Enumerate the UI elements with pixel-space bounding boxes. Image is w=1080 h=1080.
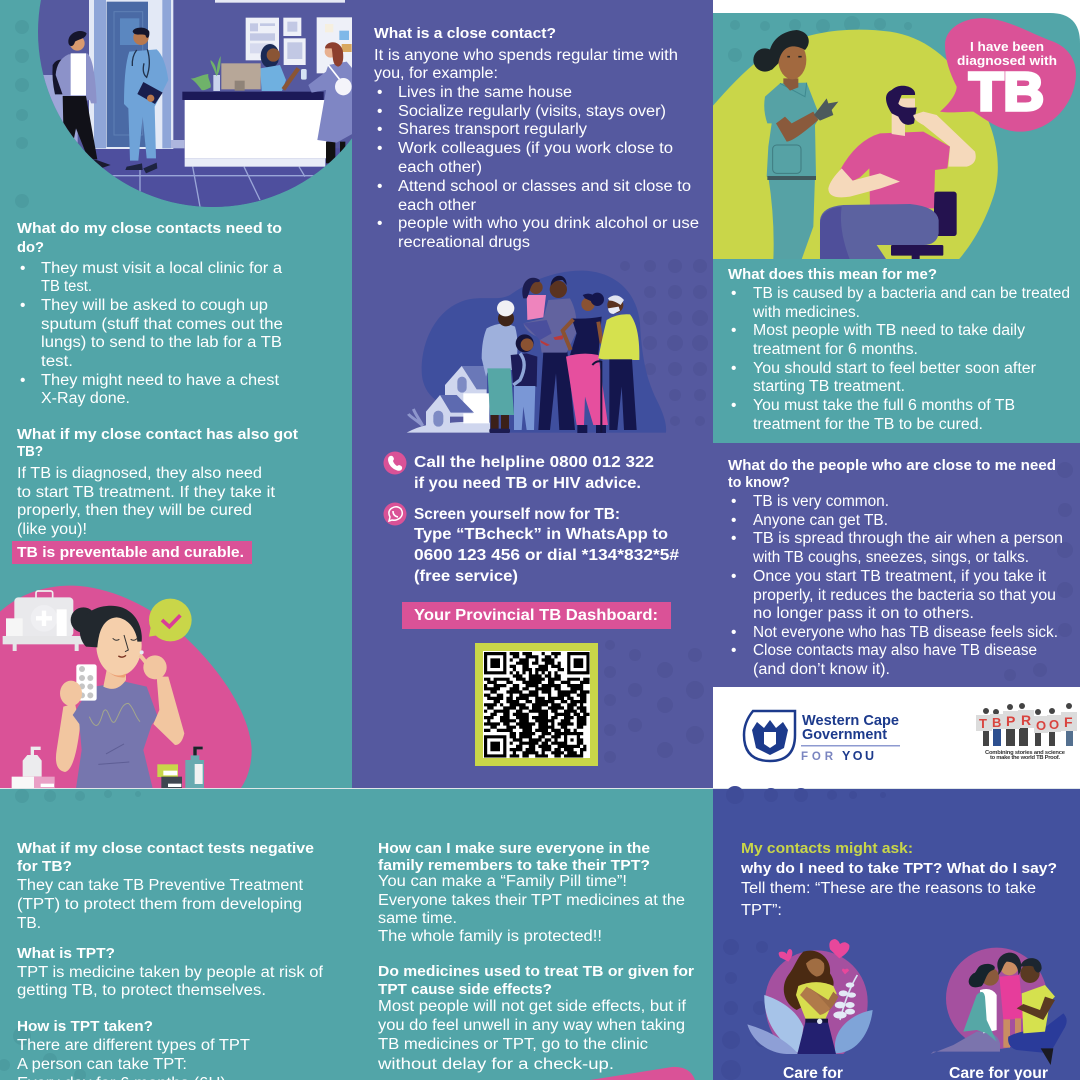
bullet list: •: [731, 512, 736, 529]
illustration: clinic reception scene: [38, 0, 352, 207]
paragraph: They can take TB Preventive Treatment: [17, 877, 304, 894]
heading: [17, 426, 298, 460]
bullet list: •: [377, 140, 382, 157]
paragraph: properly, then they will be cured: [17, 502, 252, 519]
bullet list: TB is caused by a bacteria and can be treated: [753, 285, 1070, 302]
bullet list: each other): [398, 159, 482, 176]
heading: What do the people who are close to me need: [728, 457, 1056, 474]
bullet list: •: [731, 530, 736, 547]
heading: Do medicines used to treat TB or given for: [378, 963, 694, 980]
bullet list: people with who you drink alcohol or use: [398, 215, 699, 232]
figure: mother in pink trousers: [563, 293, 608, 433]
bullet list: [20, 260, 283, 407]
figure: grandmother: [482, 300, 517, 433]
illustration: nurse and coughing patient: diagnosed with: [957, 53, 1057, 68]
icon: phone: [384, 452, 406, 474]
illustration: family in front of a house: [407, 271, 666, 433]
paragraph: If TB is diagnosed, they also need: [17, 465, 262, 482]
bullet list: •: [377, 178, 382, 195]
bullet list: starting TB treatment.: [753, 378, 905, 395]
paragraph: [17, 465, 276, 538]
icon: hearts: [779, 939, 849, 974]
paragraph: TPT”:: [741, 902, 782, 919]
logo: TB Proof: O: [1036, 718, 1046, 733]
bullet list: •: [377, 215, 382, 232]
bullet list: •: [377, 121, 382, 138]
panel: family pill time: [378, 840, 685, 945]
callout: TB is preventable and curable: TB is preventable and curable.: [17, 544, 244, 561]
figure: daughter: [522, 278, 563, 346]
figure: receptionist: [260, 44, 298, 91]
figure: young man with backpack: [52, 31, 111, 169]
QR code: [475, 643, 598, 766]
contact: helpline: [384, 452, 654, 492]
paragraph: you do feel unwell in any way when taking: [378, 1017, 685, 1034]
bullet list: •: [731, 322, 736, 339]
divider column: purple strip beside clinic illustration: [352, 0, 354, 788]
bullet list: properly, it reduces the bacteria so that you: [753, 587, 1056, 604]
bullet list: with medicines.: [752, 304, 860, 321]
bullet list: TB is spread through the air when a person: [753, 530, 1063, 547]
logo: TB Proof: [976, 703, 1077, 761]
illustration: nurse and coughing patient: I have been: [970, 39, 1044, 54]
bullet list: TB is very common.: [753, 493, 889, 510]
panel: side effects: [377, 963, 694, 1073]
figure: father holding daughter: [522, 276, 577, 430]
paragraph: without delay for a check-up.: [377, 1056, 614, 1073]
bullet list: Attend school or classes and sit close to: [398, 178, 691, 195]
finder patterns: [484, 652, 590, 758]
paragraph: TPT is medicine taken by people at risk of: [17, 964, 324, 981]
heading: TPT cause side effects?: [378, 981, 552, 998]
intro text: you, for example:: [374, 65, 498, 82]
logo: TB Proof: F: [1064, 714, 1073, 730]
bullet list: You must take the full 6 months of TB: [753, 397, 1015, 414]
bullet list: treatment for the TB to be cured.: [753, 416, 983, 433]
bullet list: Most people with TB need to take daily: [753, 322, 1025, 339]
bullet list: TB test.: [41, 278, 92, 295]
bullet list: X-Ray done.: [41, 390, 130, 407]
logo: TB Proof: R: [1021, 712, 1031, 728]
paragraph: (TPT) to protect them from developing: [17, 896, 302, 913]
logo: TB Proof: Combining stories and science: [985, 750, 1066, 756]
paragraph: A person can take TPT:: [17, 1056, 187, 1073]
icon: bottles and boxes: [12, 747, 204, 789]
paragraph: [741, 880, 1036, 919]
bullet list: •: [731, 642, 736, 659]
bullet list: [731, 285, 1070, 433]
paragraph: TB.: [17, 915, 41, 932]
bullet list: •: [20, 372, 25, 389]
bullet list: They will be asked to cough up: [41, 297, 268, 314]
paragraph: Tell them: “These are the reasons to take: [741, 880, 1036, 897]
bullet list: Shares transport regularly: [398, 121, 587, 138]
bullet list: You should start to feel better soon after: [753, 360, 1036, 377]
heading: How can I make sure everyone in the: [378, 840, 650, 857]
paragraph: [377, 998, 687, 1073]
heading: to know?: [728, 474, 790, 491]
bullet list: Work colleagues (if you work close to: [398, 140, 673, 157]
heading: [17, 220, 282, 256]
panel: how is TPT taken: [17, 1018, 251, 1080]
illustration: care for yourself: [747, 939, 1067, 1065]
paragraph: You can make a “Family Pill time”!: [378, 873, 627, 890]
WhatsApp text: 0600 123 456 or dial *134*832*5#: [414, 547, 679, 564]
bullet list: [731, 493, 1063, 678]
bullet list: Anyone can get TB.: [753, 512, 888, 529]
callout: provincial TB dashboard: Your Provincial TB Dashboard:: [414, 607, 658, 624]
intro text: It is anyone who spends regular time with: [374, 47, 678, 64]
bullet list: Lives in the same house: [398, 84, 572, 101]
paragraph: [17, 964, 324, 999]
paragraph: [17, 877, 304, 932]
panel: close contact also got TB: [17, 426, 298, 538]
paragraph: (like you)!: [17, 521, 87, 538]
bullet list: Once you start TB treatment, if you take it: [753, 568, 1047, 585]
paragraph: There are different types of TPT: [17, 1037, 251, 1054]
heading: What do my close contacts need to: [17, 220, 282, 237]
bullet list: Socialize regularly (visits, stays over): [398, 103, 666, 120]
icon: coat of arms shield: [744, 711, 795, 761]
WhatsApp text: Type “TBcheck” in WhatsApp to: [414, 526, 668, 543]
heading: why do I need to take TPT? What do I say?: [740, 860, 1057, 877]
bullet list: •: [731, 397, 736, 414]
bullet list: •: [731, 624, 736, 641]
figure: grandfather with cane: [592, 295, 639, 433]
bullet list: each other: [398, 197, 476, 214]
figure: woman hugging herself: [784, 951, 838, 1054]
heading: for TB?: [17, 858, 72, 875]
icon: houses: [407, 366, 490, 433]
callout: provincial TB dashboard: [402, 602, 671, 629]
heading: do?: [17, 239, 44, 256]
icon: medicine shelf with first aid case: [3, 591, 85, 651]
heading: How is TPT taken?: [17, 1018, 153, 1035]
heading: My contacts might ask:: [741, 840, 913, 857]
panel: close contact tests negative: [17, 840, 314, 932]
paragraph: same time.: [378, 910, 457, 927]
paragraph: [378, 873, 685, 945]
bullet list: •: [731, 493, 736, 510]
contact: WhatsApp screening: [384, 502, 679, 585]
illustration: care for your family: [931, 948, 1067, 1065]
heading: [17, 840, 314, 875]
logo: TB Proof: T: [979, 716, 987, 731]
paragraph: [17, 1037, 251, 1080]
heading: What if my close contact has also got: [17, 426, 298, 443]
logo: TB Proof: O: [1049, 717, 1059, 732]
bullet list: •: [731, 360, 736, 377]
bullet list: •: [731, 285, 736, 302]
illustration: woman taking a pill: [0, 586, 252, 789]
figure: child with backpack: [511, 334, 537, 430]
bullet list: •: [377, 84, 382, 101]
panel: what close contacts need to do: [17, 220, 283, 407]
figure: nurse: [753, 30, 838, 259]
bullet list: Not everyone who has TB disease feels sick.: [753, 624, 1058, 641]
helpline text: if you need TB or HIV advice.: [414, 475, 641, 492]
bullet list: They must visit a local clinic for a: [41, 260, 282, 277]
panel: what does this mean for me: [728, 266, 1070, 433]
panel: what close people need to know: [728, 457, 1063, 678]
heading: What is TPT?: [17, 945, 115, 962]
figure: father in yellow: [1008, 958, 1067, 1065]
WhatsApp text: [414, 506, 679, 585]
panel: what is TPT: [17, 945, 324, 999]
WhatsApp text: Screen yourself now for TB:: [414, 506, 620, 523]
bullet list: •: [731, 568, 736, 585]
helpline text: [414, 454, 654, 492]
heading: [378, 840, 650, 874]
bullet list: [377, 84, 699, 251]
figure: patient: [820, 86, 976, 260]
figure: woman with pills: [56, 606, 184, 788]
bullet list: •: [20, 260, 25, 277]
bullet list: with TB coughs, sneezes, sings, or talks.: [752, 549, 1029, 566]
logo: Western Cape Government: FOR: [801, 751, 834, 763]
decorative callout shape: pink blob: [590, 1067, 695, 1080]
bullet list: Close contacts may also have TB disease: [753, 642, 1037, 659]
heading: [378, 963, 694, 998]
logo: Western Cape Government: YOU: [842, 749, 874, 763]
bullet list: (and don’t know it).: [753, 661, 890, 678]
logo: Western Cape Government: Government: [802, 726, 887, 743]
bullet list: no longer pass it on to others.: [753, 605, 974, 622]
helpline text: Call the helpline 0800 012 322: [414, 454, 654, 471]
logo: Western Cape Government: [744, 711, 900, 763]
bullet list: They might need to have a chest: [41, 372, 280, 389]
heading: TB?: [17, 443, 43, 460]
figure: mother kneeling: [931, 964, 1000, 1054]
bullet list: •: [377, 103, 382, 120]
bullet list: recreational drugs: [398, 234, 530, 251]
paragraph: to start TB treatment. If they take it: [17, 484, 276, 501]
icon: chair: [891, 192, 957, 260]
paragraph: TB medicines or TPT, go to the clinic: [378, 1036, 648, 1053]
WhatsApp text: (free service): [414, 568, 518, 585]
illustration: nurse and coughing patient: [713, 18, 1076, 260]
heading: [728, 457, 1056, 491]
paragraph: getting TB, to protect themselves.: [17, 982, 266, 999]
figure: woman at counter: [301, 42, 353, 163]
illustration: nurse and coughing patient: TB: [969, 62, 1044, 122]
heading: What if my close contact tests negative: [17, 840, 314, 857]
panel: what is a close contact: [374, 25, 699, 251]
figure: doctor with stethoscope: [124, 28, 168, 173]
callout: TB is preventable and curable: [12, 541, 252, 564]
logo: Western Cape Government: Western Cape: [802, 712, 899, 729]
panel: my contacts might ask: [740, 840, 1057, 919]
icon: leaves: [747, 975, 873, 1054]
logo: TB Proof: P: [1006, 713, 1015, 729]
bullet list: test.: [41, 353, 73, 370]
heading: [740, 840, 1057, 877]
paragraph: Everyone takes their TPT medicines at the: [378, 892, 685, 909]
logo: TB Proof: to make the world TB Proof.: [990, 755, 1060, 761]
heading: What does this mean for me?: [728, 266, 937, 283]
paragraph: The whole family is protected!!: [378, 928, 602, 945]
heading: What is a close contact?: [374, 25, 556, 42]
bullet list: lungs) to send to the lab for a TB: [41, 334, 282, 351]
bullet list: sputum (stuff that comes out the: [41, 316, 283, 333]
heading: family remembers to take their TPT?: [378, 857, 650, 874]
logo: TB Proof: B: [992, 715, 1001, 730]
callout: I have been diagnosed with TB: [940, 18, 1076, 132]
bullet list: treatment for 6 months.: [753, 341, 918, 358]
icon: WhatsApp: [384, 502, 406, 526]
intro text: [374, 47, 678, 82]
icon: check mark speech bubble: [149, 599, 192, 641]
figure: child in pink: [997, 953, 1023, 1048]
bullet list: •: [20, 297, 25, 314]
paragraph: Most people will not get side effects, but if: [378, 998, 687, 1015]
